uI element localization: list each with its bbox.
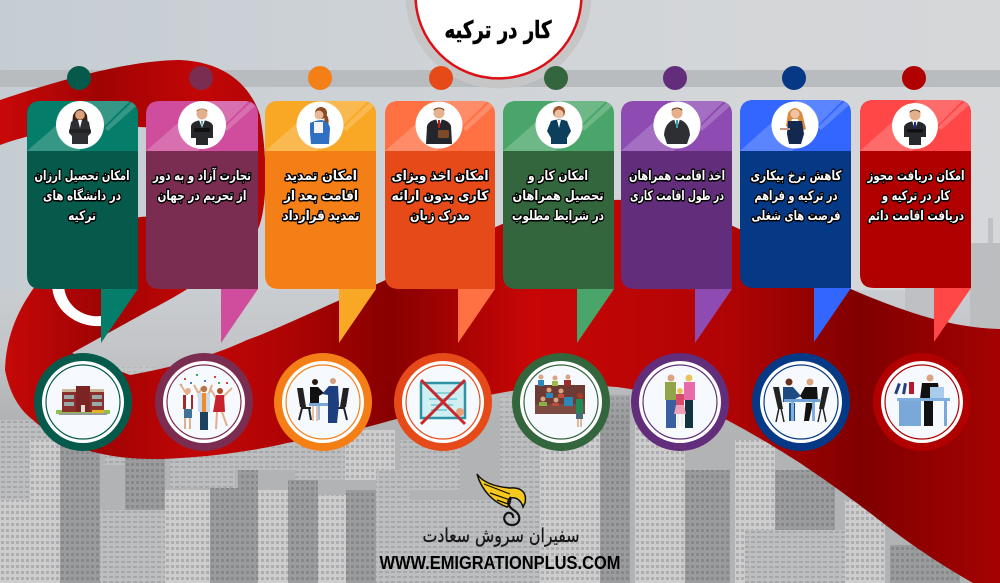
timeline dot 3 [308,66,332,90]
panel: card 6 [621,101,732,343]
grey horizontal timeline band [0,70,1000,87]
card text [392,169,489,224]
icon: classroom [512,353,610,451]
card text [34,169,130,224]
panel: card 3 [265,101,376,343]
card text: ترکیه [68,209,96,224]
timeline dot 1 [67,66,91,90]
icon: family [631,353,729,451]
avatar [56,101,104,149]
avatar [178,101,226,149]
panel: card 1 [27,101,138,343]
icon: handshake at table [274,353,372,451]
icon: crossed out certificate [394,353,492,451]
card text: اقامت بعد از [283,189,358,204]
card text [750,169,842,224]
timeline dot 6 [663,66,687,90]
company name: سفیران سروش سعادت [422,525,580,547]
panel: card 8 [860,100,971,342]
timeline dot 4 [429,66,453,90]
card text: دریافت اقامت دائم [868,209,964,224]
icon: celebrating people [155,353,253,451]
timeline dot 7 [782,66,806,90]
title: کار در ترکیه [444,16,552,44]
ribbon white crescent [52,285,101,326]
card text: تمدید قرارداد [282,209,360,224]
logo: company wing mark [477,474,525,525]
timeline dot 2 [189,66,213,90]
panel: card 5 [503,101,614,343]
title badge [406,0,592,88]
avatar [536,102,582,148]
timeline dot 8 [902,66,926,90]
card text: فرصت های شغلی [752,209,840,224]
card text [867,169,964,224]
card text [152,167,251,204]
card text: تجارت آزاد و به دور [152,167,251,184]
avatar [654,102,700,148]
panel: card 2 [146,101,258,343]
card text [629,169,725,204]
card text: کاری بدون ارائه [392,189,489,204]
avatar [892,103,938,149]
card text: امکان تمدید [285,169,357,184]
card text: در طول اقامت کاری [630,189,724,204]
panel: card 4 [385,101,495,343]
panel: card 7 [740,100,851,342]
card text: امکان کار و [527,169,588,184]
card text [512,169,604,224]
website url: WWW.EMIGRATIONPLUS.COM [380,552,620,573]
card text [282,169,360,224]
timeline dot 5 [544,66,568,90]
icon: university building [34,353,132,451]
card text: در دانشگاه های [43,188,121,204]
icon: business meeting [752,353,850,451]
card text: امکان تحصیل ارزان [34,169,130,184]
card text: کاهش نرخ بیکاری [750,169,842,184]
card text: اخذ اقامت همراهان [629,169,725,184]
avatar [296,102,344,148]
card text: در ترکیه و فراهم [754,189,838,204]
avatar [416,102,462,148]
card text: در شرایط مطلوب [512,209,604,224]
card text: تحصیل همراهان [512,189,604,204]
card text: امکان دریافت مجوز [867,169,964,184]
card text: امکان اخذ ویزای [392,169,488,184]
card text: کار در ترکیه و [881,189,950,204]
icon: employee at desk [873,353,971,451]
card text: از تحریم در جهان [158,189,246,204]
card text: مدرک زبان [410,209,470,224]
avatar [772,102,818,148]
